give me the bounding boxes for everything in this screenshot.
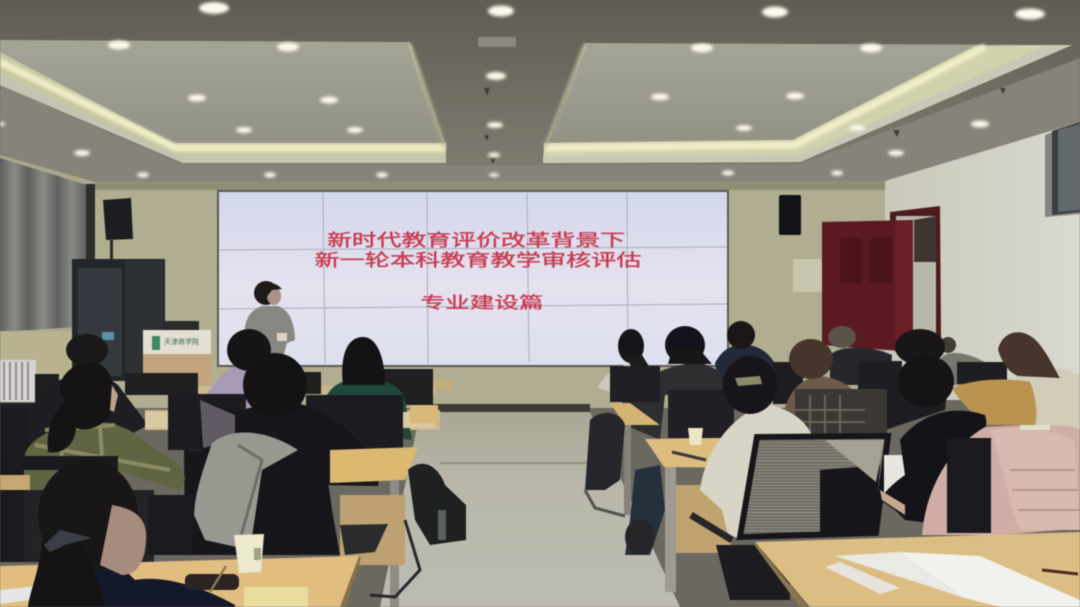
- attendee: woman in lilac: [203, 329, 271, 420]
- attendee: woman in cream far right: [998, 332, 1080, 430]
- attendee: man in plaid shirt: [785, 339, 887, 435]
- chair row front left: [0, 456, 193, 562]
- paper cup: [234, 534, 264, 573]
- chair row middle left: [0, 394, 403, 458]
- grey coat: [194, 433, 298, 550]
- attendee: man at back left: [34, 334, 148, 440]
- attendee: woman in black with curly hair: [880, 355, 986, 525]
- mesh chair: [691, 436, 888, 600]
- legs and shoes: [625, 465, 665, 555]
- right back row: [598, 321, 1007, 404]
- ceiling: [0, 0, 1080, 190]
- chair back row right: [610, 366, 734, 438]
- attendee: woman in green: [327, 337, 412, 440]
- door: red wooden door: [822, 206, 941, 352]
- back row desks left: [145, 380, 452, 430]
- front desk left: [0, 556, 361, 607]
- speaker right: [779, 195, 801, 235]
- back row desk right with bag: [585, 403, 660, 516]
- ceiling lights: [0, 2, 1045, 178]
- backpack: [408, 464, 466, 545]
- attendee: woman in cream with headband: [700, 356, 835, 540]
- floor: [380, 412, 680, 607]
- speaker left: [103, 198, 133, 260]
- back wall: [92, 181, 892, 412]
- attendee: front woman in navy: [28, 460, 239, 607]
- desk middle row left: [330, 447, 420, 607]
- podium: [143, 321, 211, 385]
- equipment rack: [72, 259, 165, 381]
- attendee: woman in plaid: [25, 362, 185, 515]
- keyboard and pen: [185, 574, 239, 590]
- pink coat on chair: [922, 425, 1080, 535]
- middle desk left: [145, 405, 438, 428]
- attendee: woman with ponytail in dark jacket: [622, 326, 722, 440]
- slide title: 新时代教育评价改革背景下: [327, 231, 625, 250]
- slide title: [314, 231, 642, 312]
- chairs back row left: [0, 369, 433, 463]
- papers on desk: [825, 552, 1080, 607]
- chair with coat: [184, 433, 388, 555]
- podium: 天津商学院: [164, 337, 199, 346]
- wall whiteboard: [793, 259, 822, 292]
- left wall with curtain: [0, 155, 95, 402]
- slide title: 新一轮本科教育教学审核评估: [314, 251, 642, 270]
- right wall with window: [885, 122, 1080, 400]
- tan coat on chair: [952, 380, 1036, 425]
- presenter: [245, 281, 295, 354]
- slide title: 专业建设篇: [420, 294, 544, 312]
- attendee: woman with black sweater: [200, 353, 380, 540]
- front desk right: [755, 532, 1080, 607]
- desk right middle row: [645, 428, 858, 592]
- screen: LED video wall: [217, 190, 729, 367]
- attendee: dark haired back right: [885, 329, 950, 430]
